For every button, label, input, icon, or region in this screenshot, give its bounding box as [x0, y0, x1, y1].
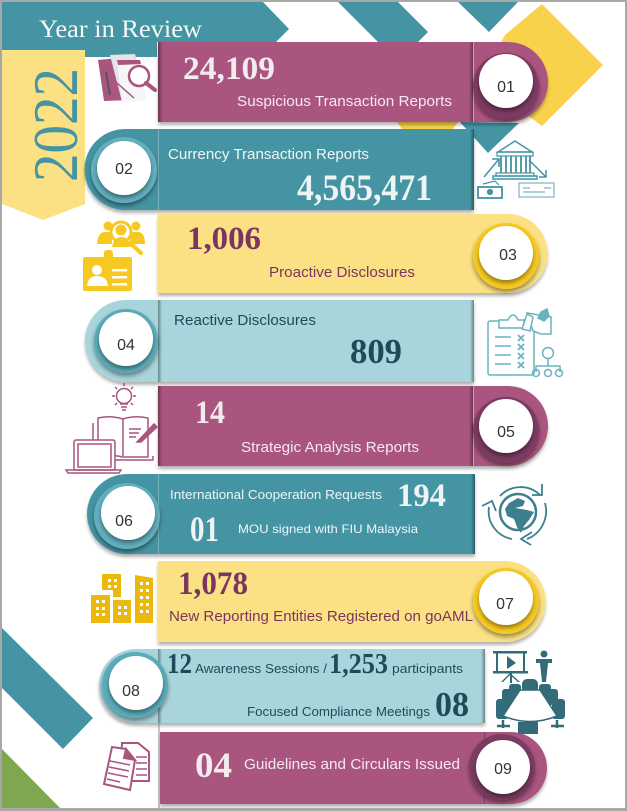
icon: globe with rotating arrows	[482, 484, 546, 545]
background: top and right geometric shapes	[338, 2, 603, 153]
panel 06: international cooperation	[87, 474, 475, 554]
badge	[473, 397, 539, 463]
panel 04: reactive disclosures	[85, 300, 474, 382]
value: 24,109	[183, 51, 275, 87]
label: Reactive Disclosures	[174, 313, 316, 329]
label: Strategic Analysis Reports	[241, 440, 419, 456]
label: Guidelines and Circulars Issued	[244, 757, 460, 773]
value: 1,253: 1,253	[329, 649, 388, 680]
value: 08: 08	[435, 685, 469, 724]
year bookmark	[2, 50, 91, 220]
value: 12: 12	[167, 649, 192, 680]
label: cooperation requests: International Cooperation Requests	[170, 488, 382, 502]
icon: meeting room	[493, 650, 565, 734]
value: 194: 194	[397, 478, 446, 514]
icon: buildings	[91, 574, 153, 623]
label: MOU: MOU signed with FIU Malaysia	[238, 522, 418, 536]
badge	[473, 53, 539, 119]
title: Year in Review	[39, 16, 202, 43]
badge: 09	[494, 761, 512, 778]
panel 01: suspicious transaction reports	[158, 42, 548, 122]
icon: people search and ID card	[83, 222, 145, 291]
panel 03: proactive disclosures	[158, 214, 548, 293]
year: 2022	[20, 68, 91, 182]
value: 01: 01	[190, 509, 219, 549]
badge	[94, 309, 158, 373]
panel 08: awareness sessions	[99, 649, 485, 724]
icon: documents and magnifier	[98, 54, 155, 103]
value: 4,565,471	[297, 168, 432, 209]
label: focused compliance meetings: Focused Compliance Meetings	[247, 704, 431, 719]
label: Currency Transaction Reports	[168, 147, 369, 163]
badge: 05	[497, 424, 515, 441]
label: Proactive Disclosures	[269, 265, 415, 281]
badge: 03	[499, 247, 517, 264]
panel 05: strategic analysis reports	[158, 386, 548, 466]
value: 14	[195, 395, 225, 431]
value: 04	[195, 745, 232, 785]
badge	[91, 137, 157, 203]
icon: documents	[104, 743, 149, 790]
value: 1,078	[178, 566, 248, 602]
badge: 02	[115, 161, 133, 178]
header ribbon	[2, 2, 289, 57]
icon: checklist and organisation chart	[488, 309, 562, 376]
value: 809	[350, 332, 402, 371]
badge: 08	[122, 683, 140, 700]
label: participants: participants	[392, 661, 464, 676]
badge	[473, 568, 539, 634]
icon: light bulb, book and laptop	[66, 383, 157, 473]
background: bottom-left stripes	[2, 628, 93, 808]
badge	[102, 652, 168, 718]
badge: 06	[115, 513, 133, 530]
badge	[473, 223, 539, 289]
icon: bank with money and cheque	[478, 141, 554, 198]
panel 02: currency transaction reports	[84, 129, 474, 210]
badge: 07	[496, 596, 514, 613]
value: 1,006	[187, 221, 261, 257]
badge	[94, 483, 160, 549]
label: awareness sessions: Awareness Sessions /	[195, 661, 327, 676]
panel 07: new reporting entities	[158, 561, 546, 642]
label: Suspicious Transaction Reports	[237, 94, 452, 110]
badge: 01	[497, 79, 515, 96]
label: New Reporting Entities Registered on goAML	[169, 608, 473, 625]
panel 09: guidelines and circulars	[158, 723, 547, 808]
badge: 04	[117, 337, 135, 354]
badge	[469, 734, 535, 800]
